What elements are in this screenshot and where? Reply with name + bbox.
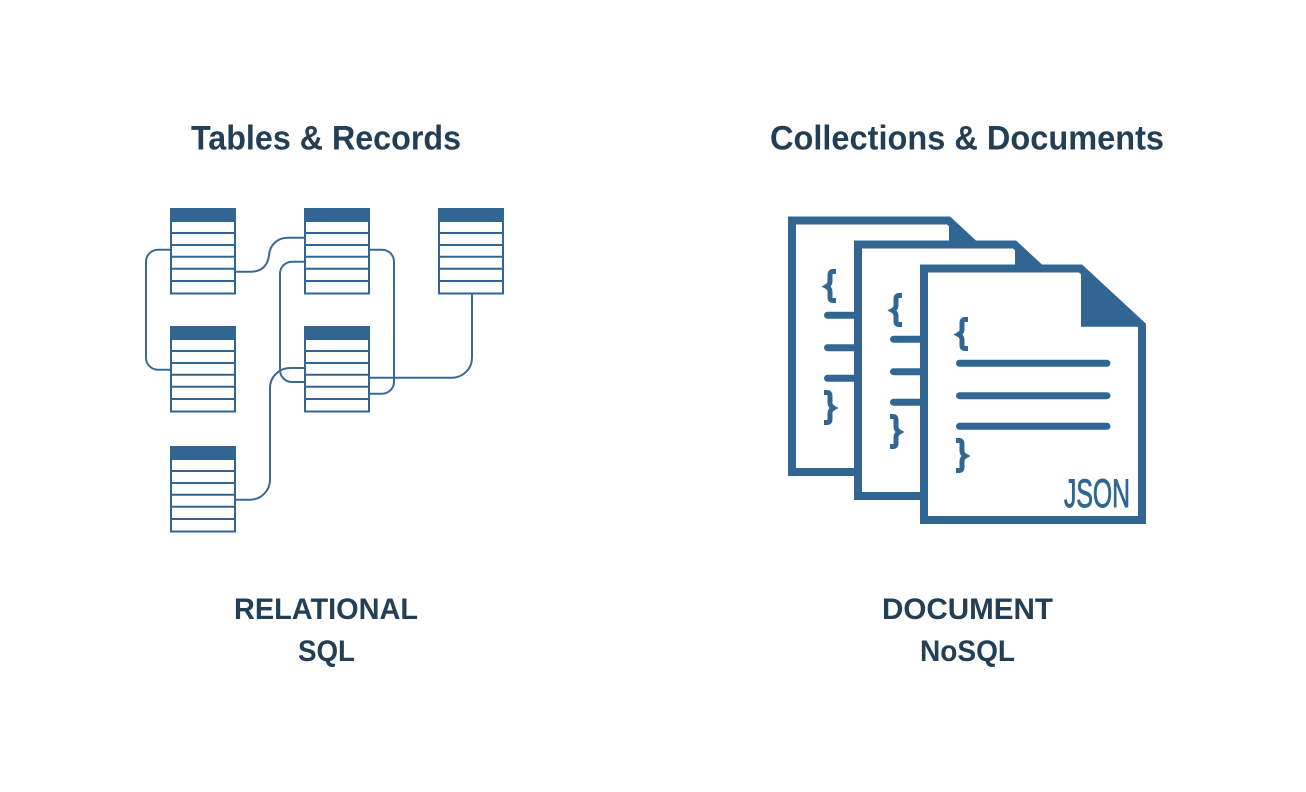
caption: NoSQL: NoSQL <box>920 635 1015 668</box>
document: back <box>792 220 1010 472</box>
icon: closing brace <box>956 440 966 470</box>
icon: content lines <box>960 363 1107 426</box>
connector: table 2 to table 5 right <box>370 250 394 394</box>
label: JSON: JSON <box>1064 472 1130 516</box>
table 6 <box>170 446 236 532</box>
document: middle <box>858 244 1076 496</box>
table 3 <box>438 208 504 294</box>
table 4 <box>170 326 236 412</box>
connector: table 2 to table 5 left <box>280 262 304 382</box>
connector: table 6 to table 5 <box>236 368 304 500</box>
icon: folded corner <box>1081 272 1138 327</box>
caption: SQL: SQL <box>298 635 355 668</box>
caption: RELATIONAL: RELATIONAL <box>234 593 418 626</box>
icon: opening brace <box>958 320 968 348</box>
table 2 <box>304 208 370 294</box>
diagram: JSON documents <box>792 220 1142 520</box>
heading: Collections & Documents: Collections & Documents <box>770 120 1164 158</box>
connector: table 3 to table 5 <box>370 294 472 378</box>
connector: table 1 to table 4 <box>146 250 170 370</box>
diagram: relational tables <box>146 208 504 532</box>
heading: Tables & Records: Tables & Records <box>191 120 461 158</box>
table 5 <box>304 326 370 412</box>
document: front <box>924 268 1142 520</box>
connector: table 1 to table 2 <box>236 238 304 272</box>
table 1 <box>170 208 236 294</box>
caption: DOCUMENT: DOCUMENT <box>882 593 1053 626</box>
